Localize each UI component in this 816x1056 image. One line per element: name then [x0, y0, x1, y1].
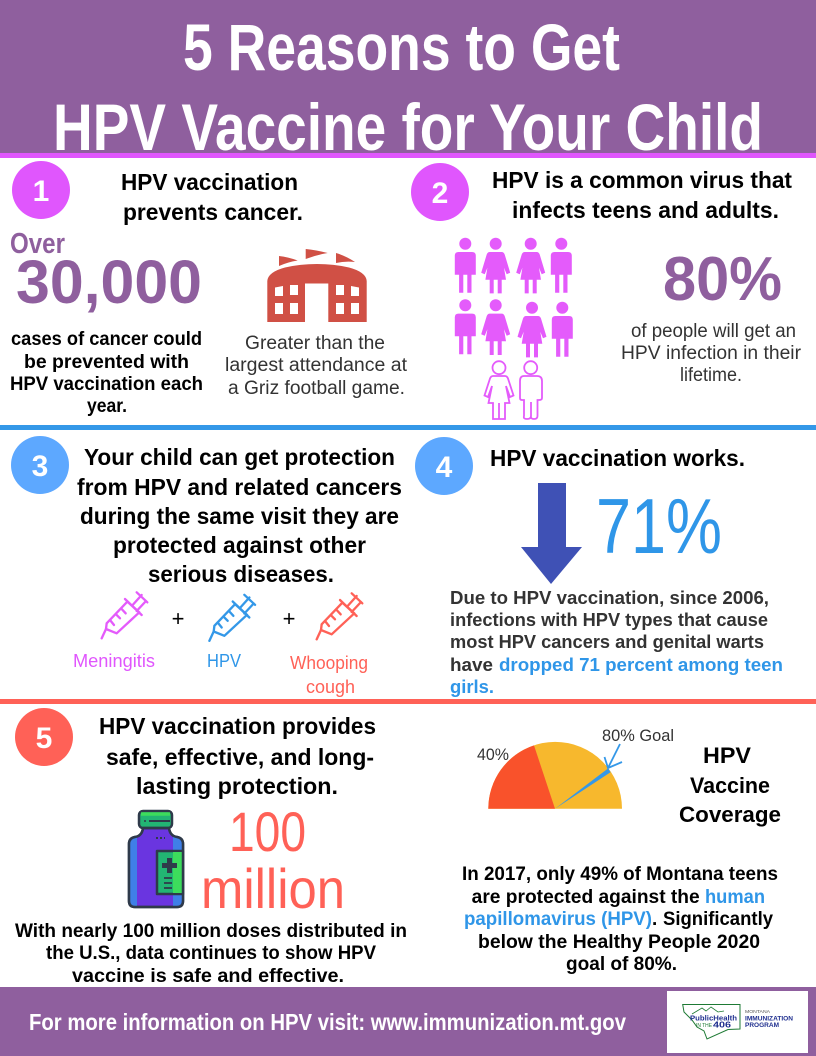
- panel: reason 2: [411, 163, 802, 419]
- text: montana coverage: papillomavirus (HPV): [464, 909, 652, 930]
- text: infection: lifetime.: [680, 365, 742, 386]
- number badge 5: [15, 708, 73, 766]
- number badge 2: [411, 163, 469, 221]
- heading 4: HPV vaccination works.: [490, 445, 745, 471]
- panel: reason 3: [11, 436, 402, 697]
- text: montana coverage: In 2017, only 49% of Montana teens: [462, 864, 778, 885]
- icon: vaccine bottle: [129, 811, 183, 907]
- plus sign: +: [172, 606, 184, 631]
- heading 2: infects teens and adults.: [512, 197, 779, 223]
- footer link text: For more information on HPV visit: www.immunization.mt.gov: [29, 1009, 626, 1035]
- number badge 3: 3: [32, 450, 48, 483]
- panel: reason 4: [415, 437, 783, 697]
- text: dropped 71 percent: Due to HPV vaccination, since 2006,: [450, 587, 769, 608]
- big stat: 80%: 80%: [663, 245, 782, 314]
- text: dropped 71 percent: have: [450, 654, 493, 675]
- heading 3: protected against other: [113, 532, 366, 558]
- number badge 2: 2: [432, 177, 448, 210]
- heading 2: [492, 167, 792, 223]
- heading: hpv vaccine coverage: [679, 743, 781, 827]
- text: infection: [621, 321, 802, 386]
- heading 5: [99, 713, 376, 799]
- text: griz football: [225, 333, 408, 399]
- text: cases of cancer: be prevented with: [24, 352, 189, 373]
- heading 3: Your child can get protection: [84, 444, 395, 470]
- logo: MONTANA: [745, 1009, 770, 1014]
- text: cases of cancer: cases of cancer could: [11, 329, 202, 350]
- text: dropped 71 percent: infections with HPV types that cause: [450, 609, 768, 630]
- icon: syringe meningitis: [102, 592, 147, 638]
- label: 80% goal: 80% Goal: [602, 726, 674, 745]
- number badge 4: 4: [436, 451, 453, 484]
- text: dropped 71 percent: dropped 71 percent among teen: [499, 654, 783, 675]
- panel: reason 5: [15, 708, 781, 987]
- big stat: over 30,000: Over: [10, 228, 65, 260]
- label: whooping cough: Whooping: [290, 653, 368, 673]
- heading 3: during the same visit they are: [80, 503, 399, 529]
- heading 1: prevents cancer.: [123, 199, 303, 225]
- label: whooping cough: [290, 653, 368, 697]
- text: infection: of people will get an: [631, 321, 796, 342]
- heading 1: [121, 169, 303, 225]
- heading: hpv vaccine coverage: HPV: [703, 743, 751, 768]
- text: dropped 71 percent: most HPV cancers and genital warts: [450, 631, 764, 652]
- big stat: 100 million: [201, 800, 345, 920]
- heading 3: from HPV and related cancers: [77, 474, 402, 500]
- text: infection: HPV infection in their: [621, 343, 802, 364]
- title: [53, 10, 763, 164]
- icon: stadium: [267, 249, 367, 322]
- panel: reason 1: [10, 161, 408, 417]
- heading 3: serious diseases.: [148, 561, 334, 587]
- logo: IMMUNIZATION: [745, 1016, 793, 1022]
- text: doses distributed: the U.S., data continues to show HPV: [46, 943, 376, 964]
- header banner: [0, 0, 816, 164]
- icon: syringe hpv: [209, 595, 255, 641]
- text: doses distributed: [15, 921, 407, 987]
- heading 1: HPV vaccination: [121, 169, 298, 195]
- icon: syringe whooping cough: [317, 593, 362, 639]
- heading 5: HPV vaccination provides: [99, 713, 376, 739]
- heading 2: HPV is a common virus that: [492, 167, 792, 193]
- icon: down arrow: [521, 483, 582, 584]
- text: cases of cancer: [10, 329, 203, 417]
- label: meningitis: Meningitis: [73, 651, 155, 671]
- text: montana coverage: goal of 80%.: [566, 954, 677, 975]
- heading 5: lasting protection.: [136, 773, 338, 799]
- text: dropped 71 percent: [450, 587, 783, 697]
- heading 5: safe, effective, and long-: [106, 744, 374, 770]
- title: 5 Reasons to Get: [183, 10, 620, 84]
- text: griz football: a Griz football game.: [228, 378, 405, 399]
- logo: [667, 991, 808, 1053]
- icon: people pictogram: [455, 238, 573, 419]
- label: whooping cough: cough: [306, 677, 355, 697]
- big stat: 100 million: 100: [229, 800, 306, 863]
- heading 3: [77, 444, 402, 587]
- text: montana coverage: Significantly: [663, 909, 773, 930]
- logo: PROGRAM: [745, 1023, 779, 1029]
- text: montana coverage: human: [705, 887, 765, 908]
- chart: coverage gauge: [477, 726, 674, 809]
- text: montana coverage: are protected against the: [472, 887, 700, 908]
- text: griz football: Greater than the: [245, 333, 385, 354]
- text: montana coverage: [462, 864, 778, 975]
- label: 40%: 40%: [477, 745, 509, 764]
- number badge 1: 1: [33, 175, 49, 208]
- number badge 1: [12, 161, 70, 219]
- big stat: over 30,000: 30,000: [16, 248, 202, 316]
- text: cases of cancer: year.: [87, 396, 127, 417]
- logo: IN THE: [696, 1023, 713, 1029]
- text: doses distributed: vaccine is safe and effective.: [72, 966, 344, 987]
- number badge 3: [11, 436, 69, 494]
- logo: PublicHealth: [690, 1014, 737, 1022]
- big stat: 71%: 71%: [596, 482, 722, 570]
- text: griz football: largest attendance at: [225, 355, 408, 376]
- label: hpv: HPV: [207, 651, 241, 671]
- text: montana coverage: below the Healthy People 2020: [478, 932, 760, 953]
- big stat: 100 million: million: [201, 857, 345, 920]
- text: cases of cancer: HPV vaccination each: [10, 374, 203, 395]
- heading: hpv vaccine coverage: Vaccine: [690, 773, 770, 798]
- number badge 5: 5: [36, 722, 52, 755]
- text: dropped 71 percent: girls.: [450, 676, 494, 697]
- plus sign: +: [283, 606, 295, 631]
- heading: hpv vaccine coverage: Coverage: [679, 802, 781, 827]
- text: doses distributed: With nearly 100 million doses distributed in: [15, 921, 407, 942]
- number badge 4: [415, 437, 473, 495]
- text: montana coverage: .: [652, 909, 657, 930]
- footer: [0, 987, 816, 1056]
- logo: 406: [713, 1020, 732, 1030]
